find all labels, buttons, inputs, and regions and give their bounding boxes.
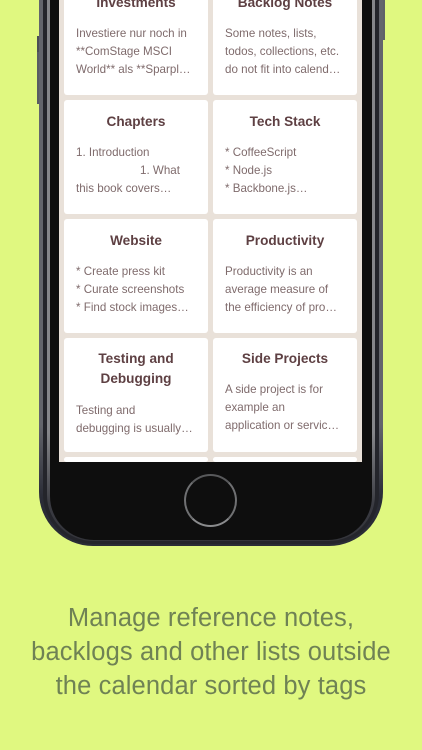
card title: Debugging xyxy=(100,371,171,386)
card: Website xyxy=(64,219,208,333)
card title: Testing and xyxy=(98,351,174,366)
card text: Investiere nur noch in xyxy=(76,27,187,40)
card text: A side project is for xyxy=(225,383,323,396)
card text: * Create press kit xyxy=(76,265,165,278)
card text: example an xyxy=(225,401,285,414)
card title xyxy=(98,351,174,386)
phone inner highlight xyxy=(47,0,375,541)
card: Side Projects xyxy=(213,338,357,452)
caption line 3: the calendar sorted by tags xyxy=(56,672,366,700)
card text: debugging is usually… xyxy=(76,422,193,435)
card title: Chapters xyxy=(107,114,165,129)
card text xyxy=(225,383,339,432)
card: Chapters xyxy=(64,100,208,214)
card text: average measure of xyxy=(225,283,328,296)
card text: Some notes, lists, xyxy=(225,27,316,40)
card title: Website xyxy=(110,233,162,248)
card text: 1. What xyxy=(140,164,180,177)
card: Backlog Notes xyxy=(213,0,357,95)
card title: Productivity xyxy=(246,233,324,248)
card text: do not fit into calend… xyxy=(225,63,340,76)
card text: this book covers… xyxy=(76,182,171,195)
card text: Productivity is an xyxy=(225,265,313,278)
card text: * Curate screenshots xyxy=(76,283,184,296)
caption line 2: backlogs and other lists outside xyxy=(31,638,391,666)
card text: * Node.js xyxy=(225,164,272,177)
icon: home button xyxy=(184,474,237,526)
right side button xyxy=(383,0,385,40)
card text: * CoffeeScript xyxy=(225,146,296,159)
card text: * Backbone.js… xyxy=(225,182,308,195)
left side buttons xyxy=(37,36,39,52)
card text: * Find stock images… xyxy=(76,301,189,314)
card text: World** als **Sparpl… xyxy=(76,63,190,76)
caption xyxy=(31,604,391,700)
card: Investments xyxy=(64,0,208,95)
card text: the efficiency of pro… xyxy=(225,301,337,314)
caption line 1: Manage reference notes, xyxy=(68,604,354,632)
card text: Testing and xyxy=(76,404,135,417)
card text xyxy=(76,27,190,76)
card text xyxy=(76,146,180,195)
card title: Tech Stack xyxy=(250,114,320,129)
card text xyxy=(76,404,193,435)
phone body xyxy=(39,0,383,546)
next row cards, cut off xyxy=(64,457,357,462)
app screen xyxy=(59,0,362,462)
phone dark band xyxy=(43,0,379,544)
phone black face xyxy=(50,0,372,540)
card text: **ComStage MSCI xyxy=(76,45,172,58)
card text xyxy=(225,27,340,76)
card: Tech Stack xyxy=(213,100,357,214)
card title: Side Projects xyxy=(242,351,328,366)
card text xyxy=(225,146,308,195)
card text xyxy=(76,265,189,314)
card text: 1. Introduction xyxy=(76,146,149,159)
card text xyxy=(225,265,337,314)
card: Productivity xyxy=(213,219,357,333)
card: Testing and Debugging xyxy=(64,338,208,452)
card text: todos, collections, etc. xyxy=(225,45,339,58)
card text: application or servic… xyxy=(225,419,339,432)
